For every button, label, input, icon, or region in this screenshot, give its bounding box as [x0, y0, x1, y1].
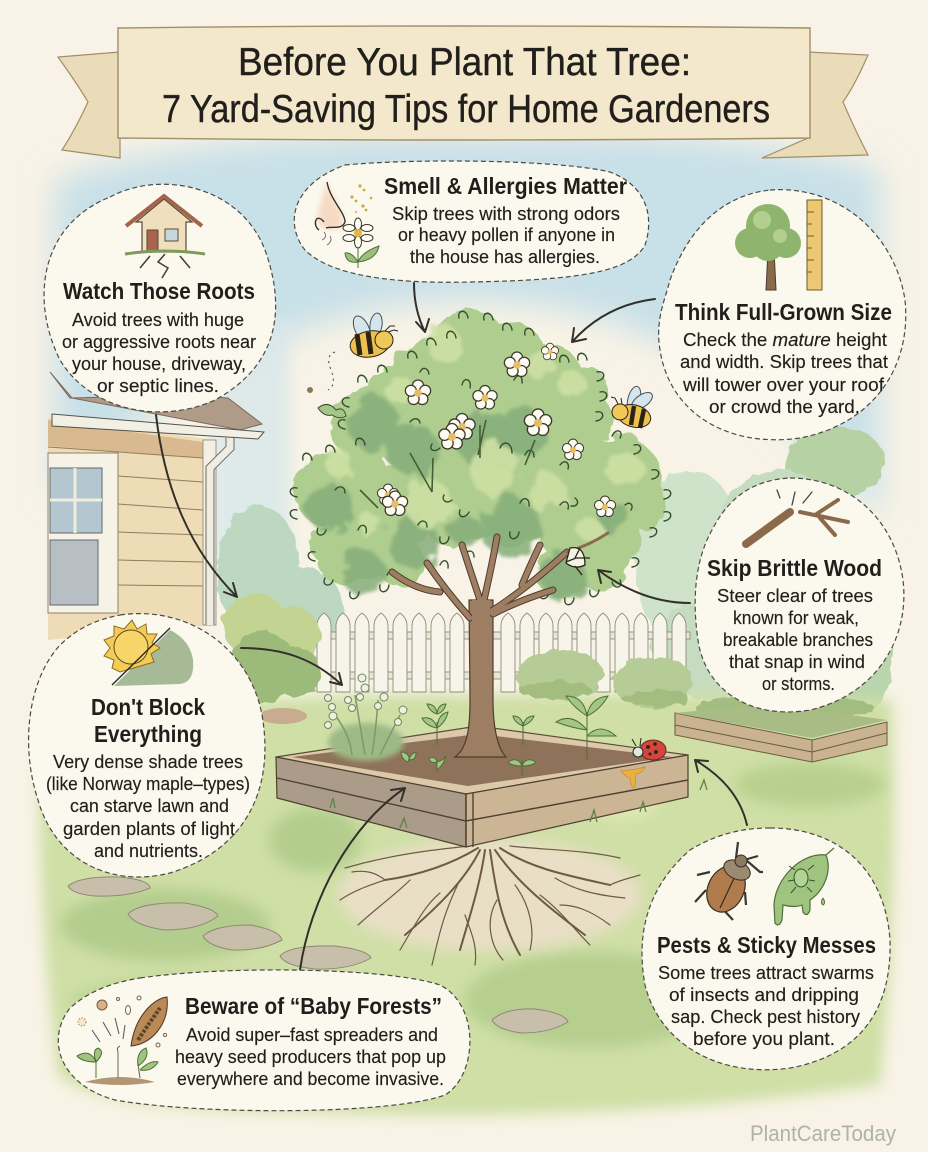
body text: or aggressive roots near — [62, 332, 256, 352]
body text: Steer clear of trees — [717, 586, 873, 606]
pale sky side — [210, 320, 290, 560]
body text: garden plants of light — [63, 819, 235, 839]
title: 7 Yard-Saving Tips for Home Gardeners — [162, 88, 770, 131]
arrow: brittle to branch — [598, 570, 690, 603]
planks — [277, 778, 688, 847]
body text: Some trees attract swarms — [658, 963, 874, 983]
watercolor scene — [39, 133, 894, 1115]
body text: Avoid super–fast spreaders and — [186, 1025, 438, 1045]
window — [48, 453, 118, 613]
body text: and width. Skip trees that — [680, 352, 888, 372]
heading: Pests & Sticky Messes — [657, 932, 876, 958]
seedlings — [401, 696, 616, 776]
body text — [46, 752, 250, 861]
icon: dripping leaf — [774, 848, 834, 925]
lawn shading — [60, 763, 885, 1048]
blossoms — [377, 343, 616, 517]
trunk — [455, 600, 506, 757]
bee right — [611, 385, 655, 431]
sky wash — [55, 133, 880, 520]
stray leaf cluster — [318, 404, 346, 418]
icon: sun and shade — [104, 620, 193, 686]
title — [162, 41, 770, 131]
lawn — [39, 693, 894, 1115]
body text: breakable branches — [723, 630, 873, 650]
icon: beetle — [695, 842, 763, 920]
body text — [680, 330, 888, 417]
wall — [48, 418, 215, 640]
trim — [203, 440, 216, 625]
heading: Everything — [94, 721, 202, 747]
body text — [175, 1025, 446, 1089]
rim and soil — [276, 726, 688, 794]
panel: think full-grown size — [659, 190, 906, 440]
panel: beware of baby forests — [58, 970, 470, 1111]
body text — [658, 963, 874, 1049]
body text: Skip trees with strong odors — [392, 204, 620, 224]
body text: or crowd the yard. — [709, 397, 860, 417]
branch crack — [566, 548, 590, 575]
body text: sap. Check pest history — [671, 1007, 860, 1027]
title: Before You Plant That Tree: — [238, 41, 691, 84]
panel: don't block everything — [29, 614, 265, 877]
panel: skip brittle wood — [695, 478, 904, 712]
branches — [392, 533, 608, 622]
heading: Watch Those Roots — [63, 278, 255, 304]
main raised bed — [276, 726, 707, 847]
heading: Smell & Allergies Matter — [384, 173, 627, 199]
canopy highlights — [326, 327, 643, 542]
trunk and branches — [455, 600, 506, 757]
shrubs — [223, 593, 875, 724]
lavender shrub — [324, 674, 407, 761]
body text: (like Norway maple–types) — [46, 774, 250, 794]
arrow: pests to bed — [695, 760, 747, 825]
body text: known for weak, — [733, 608, 859, 628]
icon: broken branch — [746, 490, 848, 544]
body text: Check the mature height — [683, 330, 887, 350]
soil — [292, 734, 672, 786]
canopy base — [294, 309, 666, 598]
mulch — [259, 708, 307, 724]
body text: of insects and dripping — [669, 985, 859, 1005]
body text: Avoid trees with huge — [72, 310, 244, 330]
bee left — [307, 312, 398, 393]
heading: Think Full-Grown Size — [675, 299, 892, 325]
twigs — [360, 420, 535, 508]
stepping stones — [68, 877, 568, 1033]
gutter — [52, 414, 264, 439]
siding — [48, 447, 203, 586]
ribbon body — [118, 26, 810, 140]
body text: everywhere and become invasive. — [177, 1069, 444, 1089]
fence — [315, 613, 690, 692]
left side — [276, 757, 466, 847]
body text: before you plant. — [693, 1029, 835, 1049]
left tail — [58, 52, 120, 158]
tree canopy — [290, 309, 671, 622]
body text: Very dense shade trees — [53, 752, 243, 772]
icon: nose and flower — [315, 182, 379, 268]
ladybug — [632, 738, 666, 760]
body text: heavy seed producers that pop up — [175, 1047, 446, 1067]
sap drip — [621, 767, 645, 787]
body text: that snap in wind — [729, 652, 865, 672]
heading: Don't Block — [91, 694, 205, 720]
watermark: PlantCareToday — [750, 1121, 896, 1146]
body text: or heavy pollen if anyone in — [398, 225, 615, 245]
right side — [466, 755, 688, 847]
arrow: smell to tree — [414, 283, 429, 332]
arrow: size to tree — [572, 299, 655, 342]
plants on rear bed — [695, 695, 875, 721]
fence shrubs — [516, 650, 875, 721]
body text: your house, driveway, — [72, 354, 246, 374]
bee trail — [328, 352, 335, 390]
body text: will tower over your roof — [682, 375, 885, 395]
grass tufts — [330, 780, 707, 828]
icon: seed pod and seedlings — [77, 996, 167, 1085]
house — [48, 372, 264, 640]
heading: Beware of “Baby Forests” — [185, 993, 442, 1019]
shrub beside house — [223, 593, 321, 704]
body text — [717, 586, 873, 694]
roof — [50, 372, 262, 430]
raised bed back right — [675, 704, 887, 762]
arrows — [156, 283, 747, 970]
body text: and nutrients. — [94, 841, 203, 861]
body text — [392, 204, 620, 267]
heading — [91, 694, 205, 747]
panel: watch those roots — [44, 184, 276, 412]
body text: or septic lines. — [97, 376, 219, 396]
scalloped leaf outlines — [290, 311, 671, 605]
panel: smell and allergies — [294, 161, 649, 282]
downspout — [210, 438, 230, 625]
icon: tree and ruler — [735, 200, 822, 290]
arrow: roots to shrub — [156, 415, 237, 597]
upper wall band — [48, 420, 203, 458]
roots under the bed — [338, 839, 642, 965]
icon: cracked house — [125, 196, 205, 278]
plants in bed — [324, 674, 616, 776]
heading: Skip Brittle Wood — [707, 555, 882, 581]
canopy shadows — [306, 397, 629, 601]
body text — [62, 310, 256, 396]
banner — [58, 26, 868, 158]
panel: pests and sticky messes — [642, 828, 890, 1070]
body text: the house has allergies. — [410, 247, 600, 267]
right tail — [762, 52, 868, 158]
arrow: seeds to bed — [300, 788, 405, 970]
arrow: block to bed — [241, 648, 342, 685]
body text: or storms. — [762, 674, 835, 694]
body text: can starve lawn and — [70, 796, 229, 816]
distant trees — [216, 426, 894, 720]
